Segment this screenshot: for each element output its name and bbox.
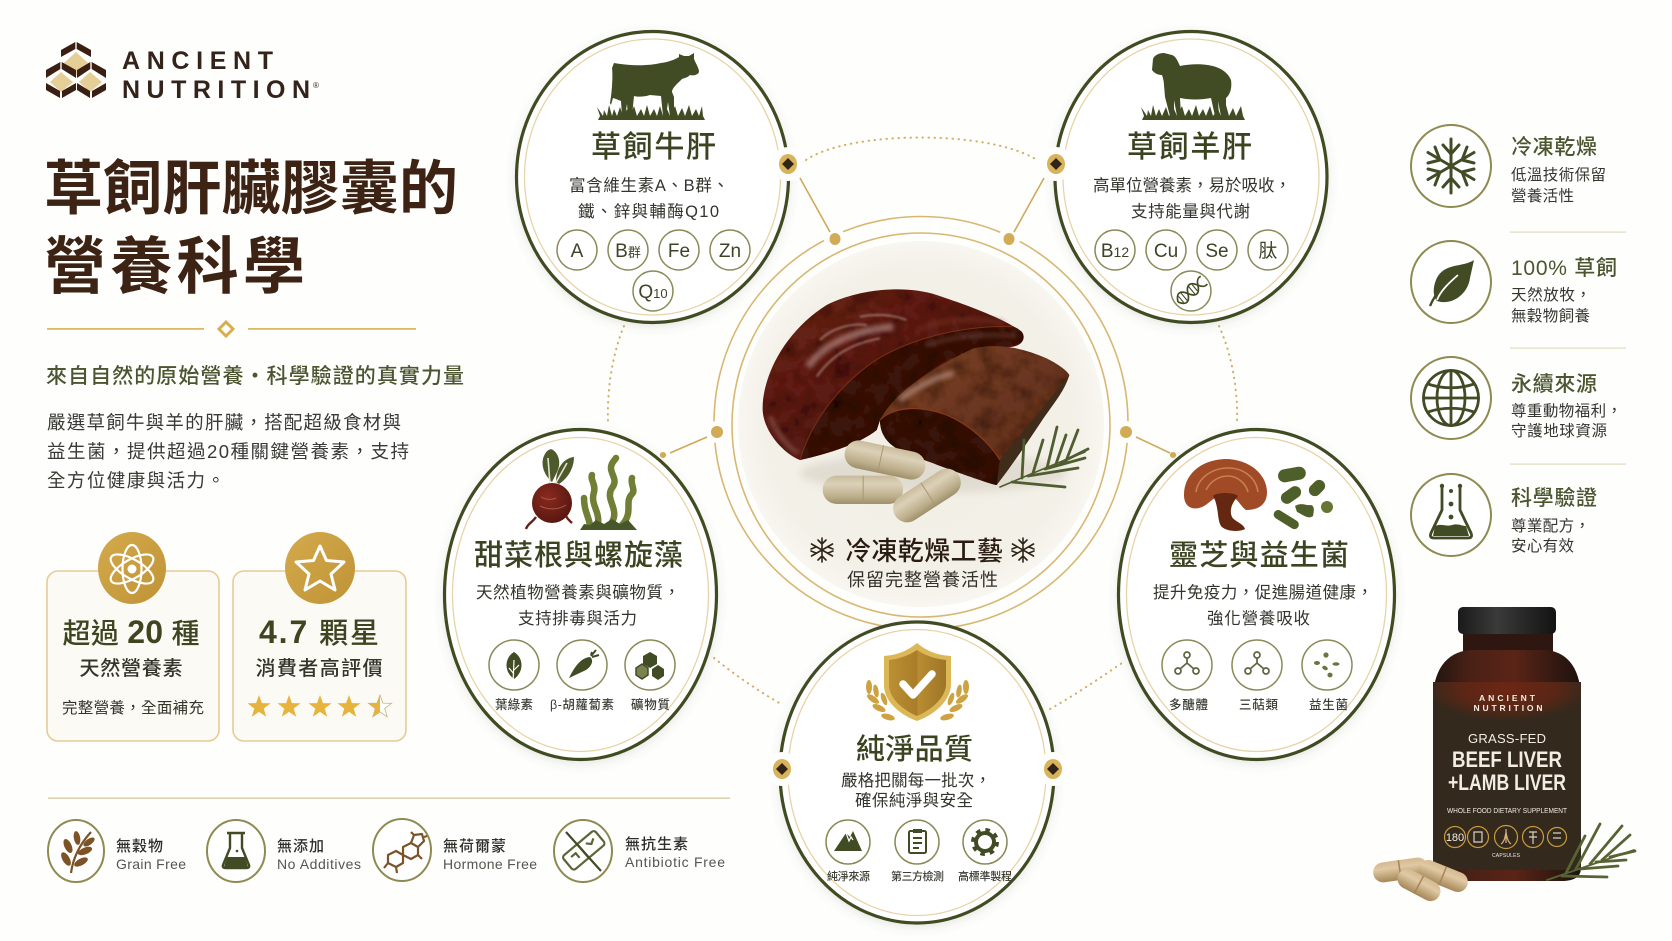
connector nodes: gold diamonds [660, 147, 1176, 786]
small liver [880, 346, 1069, 485]
logo: Ancient Nutrition [46, 42, 319, 104]
subtitle: 來自自然的原始營養・科學驗證的真實力量 [46, 365, 464, 388]
dotted connectors between panels [608, 138, 1237, 709]
nutrient chips: 肽 [1258, 240, 1278, 262]
chip: chlorophyll [489, 640, 539, 712]
panel: grass-fed beef liver [516, 32, 788, 322]
stat text: 天然營養素 [80, 656, 182, 680]
heading with snowflakes: 保留完整營養活性 [847, 570, 998, 590]
bottle label text: WHOLE FOOD DIETARY SUPPLEMENT [1447, 806, 1567, 815]
description [841, 771, 991, 810]
feature: freeze dried [1411, 125, 1606, 207]
bottle label text [1446, 693, 1567, 859]
nutrient chips: Se [1205, 241, 1229, 262]
frame [444, 430, 716, 760]
icon: star badge [285, 532, 355, 604]
rings [714, 216, 1128, 630]
icon: molecule [373, 819, 431, 881]
icon: leaf [1411, 241, 1491, 323]
chip: polysaccharides [1162, 640, 1212, 712]
icon: DNA [1174, 275, 1208, 307]
nutrient chips: Q10 [638, 282, 668, 303]
frame [516, 32, 788, 322]
bottle label text: ANCIENT [1479, 693, 1536, 703]
icon: sheep [1141, 53, 1245, 120]
nutrient chips: A [571, 241, 584, 262]
label: 無荷爾蒙 [443, 837, 506, 855]
nutrient chips [1095, 230, 1288, 311]
frame [1118, 430, 1394, 760]
heading: 純淨品質 [856, 733, 973, 766]
liver photo illustration [763, 289, 1069, 528]
nutrient chips: B群 [615, 241, 641, 262]
chip: probiotics [1302, 640, 1352, 712]
capsules [823, 438, 966, 528]
chip: minerals: 礦物質 [631, 697, 670, 712]
heading: 草飼牛肝 [591, 131, 716, 164]
stat text: 超過 20 種 [62, 614, 200, 650]
bottle label text: GRASS-FED [1468, 731, 1546, 746]
icon: flask [207, 820, 265, 882]
large liver [763, 289, 1024, 460]
description: 嚴格把關每一批次， [841, 771, 991, 790]
chip: probiotics: 益生菌 [1309, 698, 1348, 712]
heading: 靈芝與益生菌 [1169, 539, 1349, 572]
rating text: 4.7 顆星 [259, 614, 379, 650]
panel: beetroot and spirulina [444, 430, 716, 760]
panel: reishi and probiotics [1118, 430, 1394, 760]
description: 鐵、鋅與輔酶Q10 [578, 202, 719, 221]
nutrient chips: Cu [1154, 241, 1178, 262]
description: 提升免疫力，促進腸道健康， [1153, 583, 1373, 602]
chip: high-standard manufacturing: 高標準製程 [958, 869, 1012, 883]
nutrient chips: B12 [1101, 241, 1129, 262]
title: 草飼肝臟膠囊的 [44, 156, 458, 222]
bottle label icons [1444, 826, 1566, 848]
title [44, 156, 458, 302]
product bottle [1372, 607, 1635, 905]
intro paragraph: 嚴選草飼牛與羊的肝臟，搭配超級食材與 [47, 412, 401, 433]
nutrient chips [557, 230, 750, 311]
icon: spirulina [580, 458, 637, 530]
badge: hormone free: Hormone Free [443, 856, 537, 872]
description: 確保純淨與安全 [855, 791, 973, 810]
divider [48, 798, 730, 799]
stat text [62, 614, 204, 717]
chip: high-standard manufacturing [958, 820, 1012, 883]
feature: science validated: 尊業配方， [1511, 517, 1590, 535]
heading with snowflakes [811, 536, 1034, 590]
description: 富含維生素A、B群、 [569, 176, 729, 195]
chip: chlorophyll: 葉綠素 [495, 697, 533, 712]
bottle label text: CAPSULES [1492, 853, 1521, 859]
bottle cap [1458, 607, 1556, 634]
intro paragraph [47, 412, 409, 491]
stat card: 4.7 stars [233, 532, 406, 741]
rosemary sprig [1000, 427, 1088, 487]
feature: freeze dried: 低溫技術保留 [1511, 166, 1606, 184]
chip: beta-carotene [550, 640, 614, 712]
icon: shield with laurels [866, 643, 969, 722]
badge: no additives: No Additives [277, 856, 361, 872]
chip: triterpenes: 三萜類 [1239, 698, 1278, 712]
icon: globe [1411, 357, 1491, 439]
text: 100% 草飼 [1511, 257, 1617, 280]
badge: hormone free [373, 819, 537, 881]
stat text: 完整營養，全面補充 [62, 699, 204, 717]
heading: 草飼羊肝 [1127, 131, 1252, 164]
cream disc [738, 241, 1104, 607]
chip: pure source [826, 820, 870, 883]
logo wordmark: NUTRITION [122, 76, 310, 104]
logo wordmark [122, 47, 319, 104]
icon: snowflake left [811, 538, 833, 562]
logo wordmark: ® [313, 81, 319, 90]
badge: grain free [48, 820, 186, 882]
logo mark [46, 42, 106, 98]
title divider with diamond [47, 322, 416, 336]
chip: pure source: 純淨來源 [827, 869, 870, 883]
rating text: 消費者高評價 [256, 657, 382, 680]
feature: 100% grass fed: 天然放牧， [1511, 286, 1591, 304]
nutrient chips: Zn [719, 241, 741, 262]
rosemary sprig [1547, 824, 1635, 880]
connector lines to panels [670, 178, 1170, 453]
bottle label text: NUTRITION [1474, 703, 1542, 713]
feature: 100% grass fed [1411, 241, 1617, 325]
stat card: over 20 nutrients [47, 532, 219, 741]
description [1093, 176, 1291, 221]
bottle body [1433, 630, 1581, 881]
label: 無添加 [277, 837, 324, 855]
feature: science validated [1411, 474, 1597, 556]
bottle label text: 180 [1446, 832, 1464, 844]
feature: sustainable source [1411, 357, 1622, 440]
feature: sustainable source: 尊重動物福利， [1511, 402, 1622, 420]
nutrient chips: Fe [668, 241, 690, 262]
icon: probiotic capsules [1272, 466, 1333, 531]
bottle label text: BEEF LIVER [1452, 747, 1562, 772]
logo wordmark: ANCIENT [122, 47, 273, 75]
chip: third-party testing: 第三方檢測 [891, 869, 944, 883]
label: 無穀物 [116, 837, 163, 855]
panel: central freeze-dried liver [670, 178, 1170, 630]
feature: 100% grass fed: 無穀物飼養 [1511, 307, 1590, 325]
icon: snowflake [1411, 125, 1491, 207]
intro paragraph: 全方位健康與活力。 [47, 470, 225, 491]
description [476, 583, 680, 628]
chip: third-party testing [891, 820, 944, 883]
text: 冷凍乾燥 [1511, 136, 1597, 159]
text: 科學驗證 [1511, 487, 1597, 510]
feature: sustainable source: 守護地球資源 [1511, 422, 1607, 440]
chip: triterpenes [1232, 640, 1282, 712]
heading with snowflakes: 冷凍乾燥工藝 [845, 536, 1003, 566]
icon: atom badge [98, 532, 166, 604]
text: 永續來源 [1511, 373, 1597, 396]
icon: wheat [48, 820, 104, 882]
icon: cow [597, 53, 705, 120]
intro paragraph: 益生菌，提供超過20種關鍵營養素，支持 [47, 441, 409, 462]
badge: no additives [207, 820, 361, 882]
icon: reishi mushroom [1184, 459, 1267, 531]
badge: antibiotic free: Antibiotic Free [625, 854, 725, 870]
badge: antibiotic free [554, 820, 725, 882]
description [569, 176, 729, 221]
description: 天然植物營養素與礦物質， [476, 583, 680, 602]
description [1153, 583, 1373, 628]
bottle label text: +LAMB LIVER [1448, 770, 1566, 795]
description: 強化營養吸收 [1207, 609, 1310, 628]
icon: flask [1411, 474, 1491, 556]
rating stars [247, 695, 392, 717]
chip: beta-carotene: β-胡蘿蔔素 [550, 698, 614, 712]
description: 支持能量與代謝 [1131, 202, 1250, 221]
icon: snowflake right [1012, 538, 1034, 562]
icon: crossed capsule [554, 820, 612, 882]
label: 無抗生素 [625, 835, 688, 853]
feature: freeze dried: 營養活性 [1511, 187, 1574, 205]
heading: 甜菜根與螺旋藻 [474, 539, 683, 572]
icon: beetroot [526, 449, 574, 529]
panel: purity quality [780, 622, 1054, 923]
chip: minerals [625, 640, 675, 712]
title: 營養科學 [44, 233, 305, 302]
description: 高單位營養素，易於吸收， [1093, 176, 1291, 195]
badge: grain free: Grain Free [116, 856, 186, 872]
panel: grass-fed lamb liver [1055, 32, 1327, 322]
ring dots [706, 228, 1137, 443]
loose capsules [1372, 856, 1471, 905]
chip: polysaccharides: 多醣體 [1169, 697, 1208, 712]
frame [1055, 32, 1327, 322]
frame [780, 622, 1054, 923]
description: 支持排毒與活力 [518, 609, 637, 628]
feature: science validated: 安心有效 [1511, 537, 1574, 555]
rating text [256, 614, 382, 680]
